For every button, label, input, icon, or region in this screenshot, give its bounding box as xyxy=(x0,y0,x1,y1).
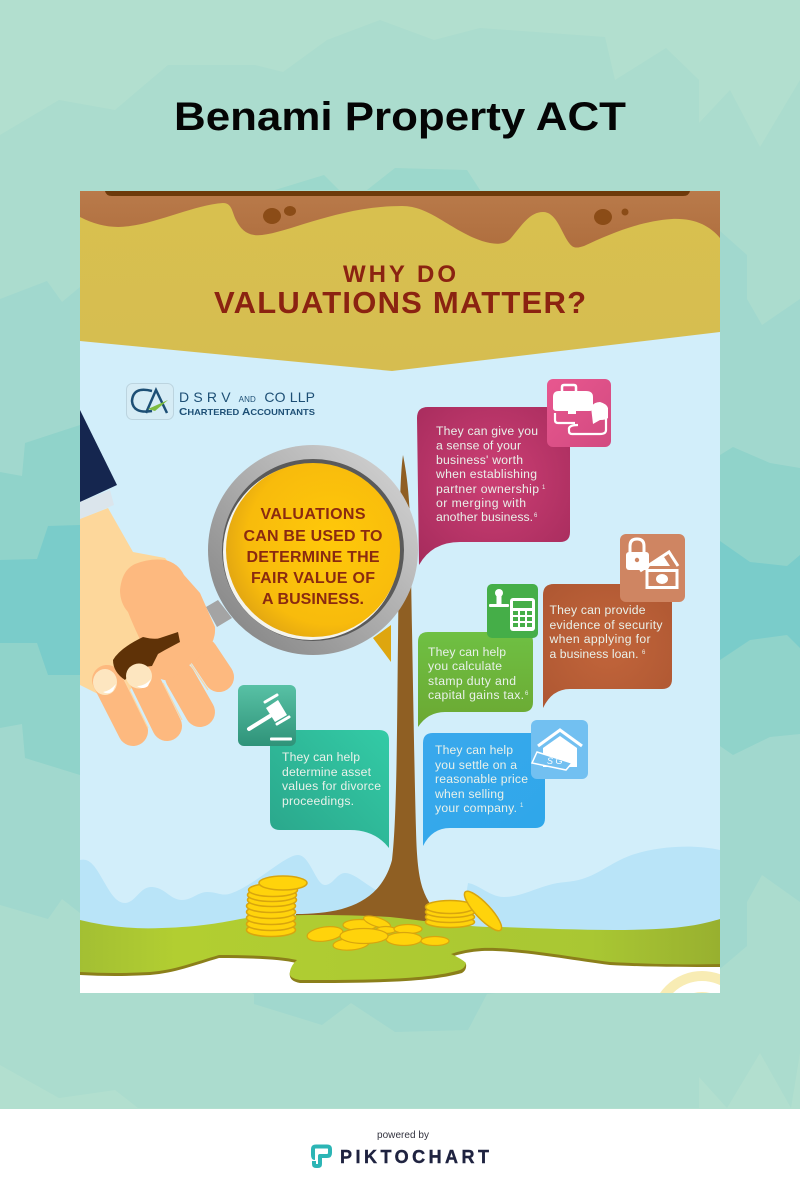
bubble: partner ownership: or merging with xyxy=(436,496,526,510)
bubble: partner ownership: a sense of your xyxy=(436,438,521,452)
powered by: powered by xyxy=(377,1130,429,1141)
bubble: business loan xyxy=(543,584,672,708)
bubble: partner ownership: They can give you xyxy=(436,424,538,438)
icon: house and money xyxy=(531,720,588,779)
logo: D S R V xyxy=(179,389,231,405)
icon: stamp and calculator xyxy=(487,584,538,638)
header band xyxy=(80,203,720,371)
right coin stack xyxy=(424,890,502,932)
piktochart logo icon xyxy=(313,1146,330,1166)
bubble: selling your company xyxy=(423,733,545,846)
bubble: divorce proceedings xyxy=(270,730,389,848)
bubble: stamp duty: They can help xyxy=(428,645,506,659)
bubble: business loan: when applying for xyxy=(548,632,650,646)
soil band xyxy=(80,191,720,248)
magnifier text: FAIR VALUE OF xyxy=(251,570,375,587)
bubble: business loan: They can provide xyxy=(550,603,646,617)
bubble: stamp duty xyxy=(418,632,533,727)
sleeve xyxy=(80,410,117,502)
magnifier text: A BUSINESS. xyxy=(262,591,364,608)
logo xyxy=(126,384,315,420)
bubble: partner ownership xyxy=(417,407,570,565)
heading: VALUATIONS MATTER? xyxy=(214,285,586,320)
bubble: partner ownership: 6 xyxy=(534,513,538,519)
magnifier text: DETERMINE THE xyxy=(246,549,380,566)
bubble: selling your company: when selling xyxy=(434,787,504,801)
bubble: divorce proceedings: They can help xyxy=(282,750,360,764)
bubble: business loan: evidence of security xyxy=(550,618,663,632)
magnifying glass xyxy=(208,445,418,655)
bubble: stamp duty: capital gains tax. xyxy=(428,688,524,702)
bubble: selling your company: your company. xyxy=(435,801,517,815)
hills xyxy=(80,855,376,928)
loose coins xyxy=(306,913,449,952)
heading xyxy=(214,265,584,314)
bubble: business loan: 6 xyxy=(642,650,646,656)
faint coin watermark xyxy=(660,971,720,993)
icon: briefcases xyxy=(547,379,611,447)
ground xyxy=(80,948,720,983)
bubble: stamp duty: you calculate xyxy=(428,659,502,673)
piktochart wordmark: PIKTOCHART xyxy=(340,1147,489,1167)
bubble: stamp duty: stamp duty and xyxy=(428,674,516,688)
bubble: partner ownership: another business. xyxy=(436,510,533,524)
hand xyxy=(80,508,219,731)
bubble: selling your company: reasonable price xyxy=(435,772,528,786)
magnifier text xyxy=(244,506,382,608)
bubble: divorce proceedings: values for divorce xyxy=(282,779,381,793)
cuff xyxy=(80,490,114,519)
soil top edge xyxy=(105,191,690,196)
bubble: selling your company: They can help xyxy=(435,743,513,757)
bubble: selling your company: 1 xyxy=(520,803,524,809)
bubble: partner ownership: 1 xyxy=(542,485,546,491)
sky xyxy=(80,332,720,903)
soil pebbles xyxy=(263,206,628,225)
tree trunk xyxy=(296,455,431,925)
magnifier text: VALUATIONS xyxy=(260,506,366,523)
icon: house and money: S G xyxy=(547,756,563,766)
magnifier handle xyxy=(206,600,232,627)
bubble: divorce proceedings: proceedings. xyxy=(282,794,354,808)
logo: AND xyxy=(237,395,258,404)
magnifier tail xyxy=(373,625,391,662)
left coin stack xyxy=(246,876,307,936)
title: Benami Property ACT xyxy=(174,95,626,139)
logo: CHARTERED ACCOUNTANTS xyxy=(179,406,315,418)
bubble: selling your company: you settle on a xyxy=(435,758,517,772)
icon: gavel xyxy=(238,685,296,746)
footer xyxy=(0,1109,800,1189)
bubble: stamp duty: 6 xyxy=(525,691,529,697)
bubble: partner ownership: business' worth xyxy=(436,453,523,467)
bubble: business loan: a business loan. xyxy=(550,647,638,661)
bubble: partner ownership: when establishing xyxy=(435,467,537,481)
bubble: partner ownership: partner ownership xyxy=(436,482,539,496)
infographic card xyxy=(80,191,720,993)
logo: CO LLP xyxy=(264,389,315,405)
heading: WHY DO xyxy=(343,261,456,288)
bubble: divorce proceedings: determine asset xyxy=(282,765,372,779)
magnifier text: CAN BE USED TO xyxy=(244,528,382,545)
icon: lock and cash xyxy=(620,534,685,602)
